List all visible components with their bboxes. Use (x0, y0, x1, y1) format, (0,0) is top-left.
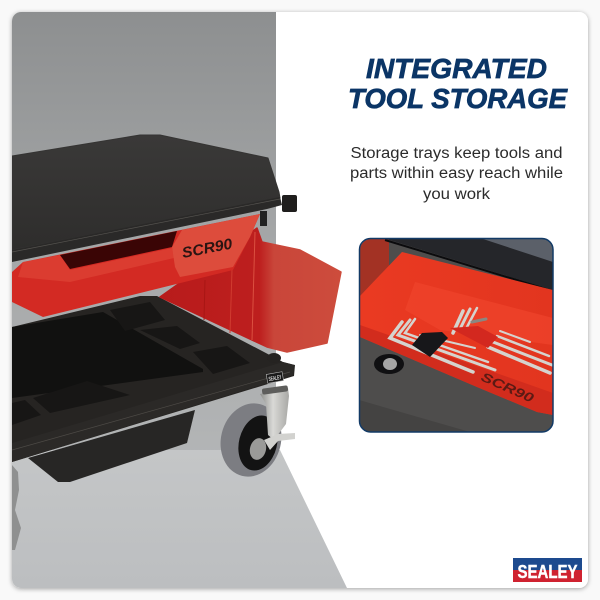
description text: Storage trays keep tools and (350, 145, 562, 162)
hex key set left (390, 319, 495, 372)
seat underside (383, 238, 553, 290)
inset photo: tray with hex keys (359, 238, 554, 433)
brand plate: SEALEY (268, 375, 282, 383)
lower tray underside bin (28, 410, 195, 482)
red side bin (160, 228, 341, 352)
caster in photo (374, 354, 404, 374)
wall (12, 12, 276, 472)
tray front lip (360, 325, 553, 415)
drawer cutout (60, 231, 177, 269)
rear caster fragment (12, 465, 21, 550)
hex key holder left (412, 332, 448, 357)
corner knob (269, 353, 281, 360)
drawer model label: SCR90 (181, 235, 235, 262)
description text: you work (423, 186, 490, 203)
seat cushion (12, 135, 297, 262)
hex key set right (453, 308, 552, 373)
floor (12, 450, 347, 588)
title: TOOL STORAGE (348, 83, 569, 114)
front caster wheel (220, 386, 295, 477)
concrete floor (359, 238, 554, 433)
tray compartments (12, 302, 250, 425)
drawer label plate (172, 214, 260, 277)
red drawer tray (12, 214, 260, 317)
brand logo: SEALEY (518, 562, 578, 582)
lower tray (12, 296, 295, 462)
photo frame (360, 238, 553, 432)
brand plate (266, 372, 284, 383)
caster brake lever (264, 433, 295, 450)
hex key holder right (450, 326, 498, 348)
tray model label: SCR90 (479, 369, 537, 406)
panel: product scene (12, 12, 347, 588)
seat handle (282, 195, 297, 212)
description text (350, 145, 563, 203)
title: INTEGRATED (366, 53, 547, 84)
red tray interior (359, 252, 553, 415)
description text: parts within easy reach while (350, 165, 563, 182)
title (348, 53, 569, 114)
background red wall (359, 238, 389, 298)
